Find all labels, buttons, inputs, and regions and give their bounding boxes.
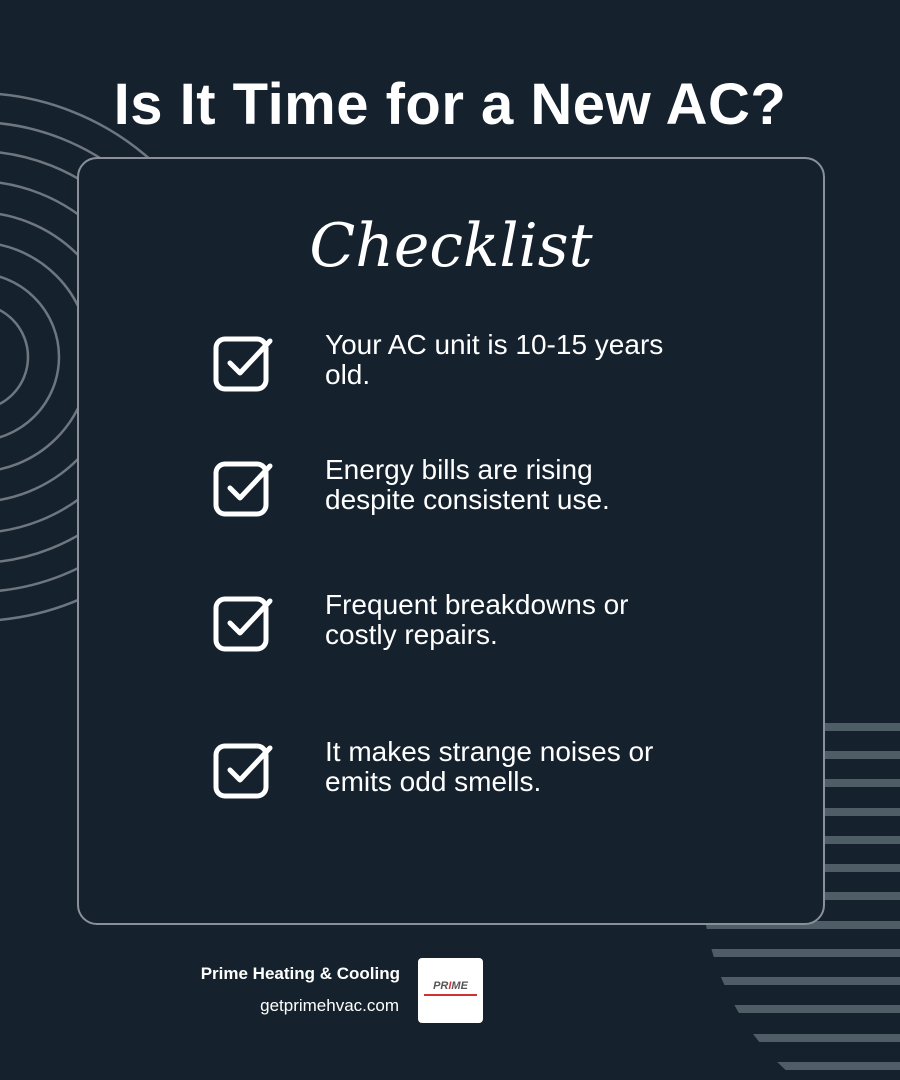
checklist item 2: Energy bills are rising — [325, 454, 593, 485]
checklist item 1: Your AC unit is 10-15 years old. — [325, 329, 663, 390]
footer: website: getprimehvac.com — [260, 996, 399, 1015]
checklist item 2: despite consistent use. — [325, 484, 610, 515]
panel: checklist card — [77, 157, 825, 925]
checklist item 2 — [214, 454, 610, 516]
checklist item 3: Frequent breakdowns or — [325, 589, 629, 620]
logo — [418, 958, 483, 1023]
logo: PRIME — [433, 980, 468, 992]
footer: company name: Prime Heating & Cooling — [201, 964, 400, 983]
checklist item 3 — [214, 589, 629, 652]
checklist item 3: costly repairs. — [325, 619, 498, 650]
heading: Checklist: Checklist — [309, 211, 593, 281]
checklist item 4: emits odd smells. — [325, 766, 541, 797]
checklist item 4: It makes strange noises or — [325, 736, 653, 767]
checklist item 4 — [214, 736, 653, 798]
title: Is It Time for a New AC? — [114, 72, 786, 137]
